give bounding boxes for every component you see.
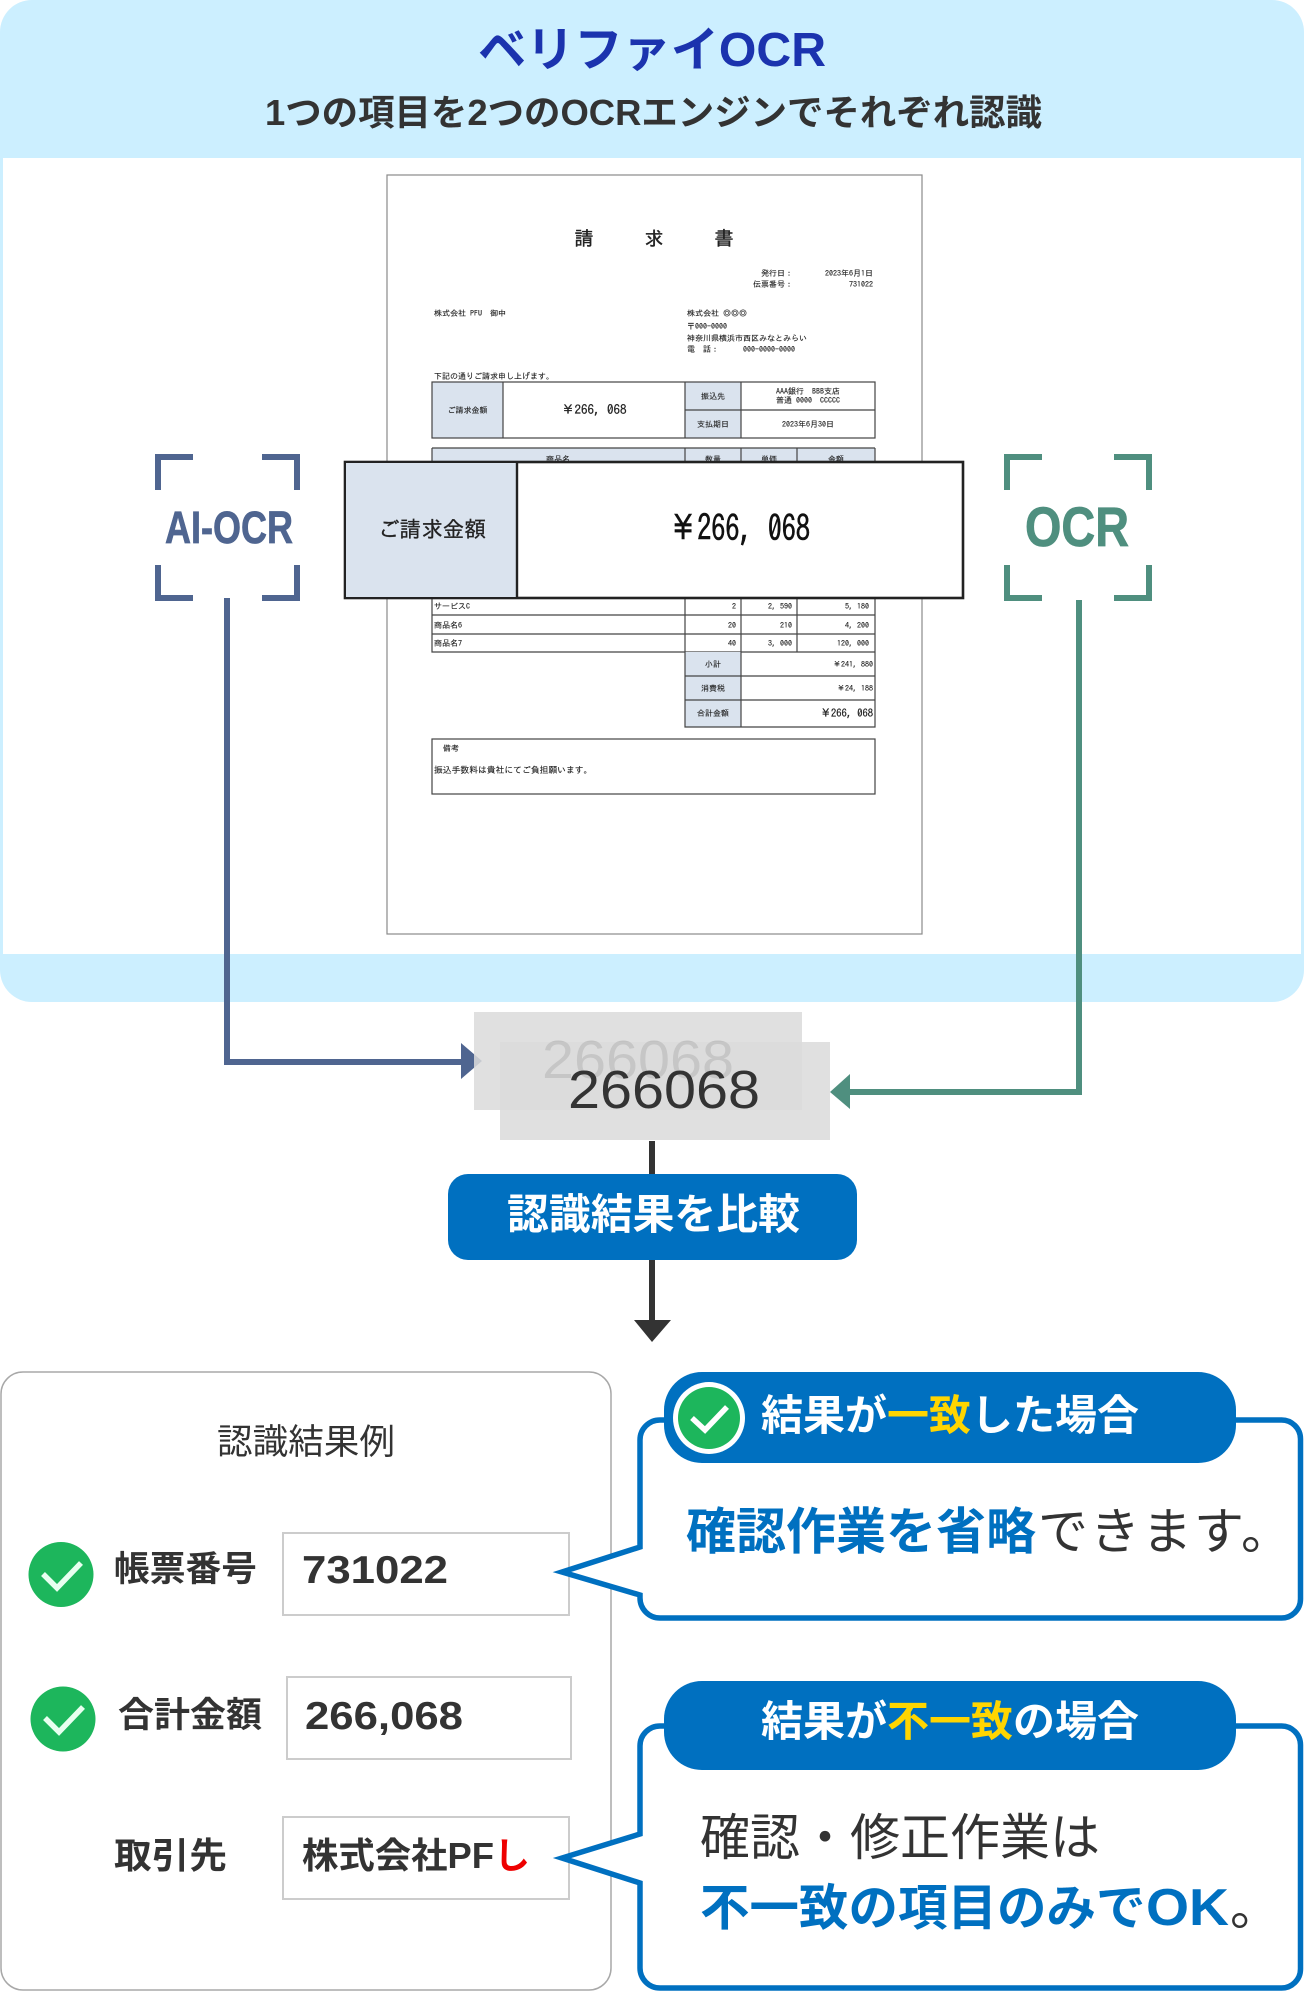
invoice items table: 120, 000 [837,639,869,648]
callout: results mismatch [562,1681,1300,1988]
invoice title: 書 [714,229,734,248]
OCR bracket label: OCR [1025,495,1129,558]
invoice items table: 2 [732,602,736,610]
invoice items table: 金額 [828,455,844,464]
invoice meta: 発行日： [761,269,793,278]
row: client [114,1817,569,1899]
invoice amount table: ¥266, 068 [562,403,627,416]
invoice totals: 小計 [705,660,721,669]
invoice items table: 20 [728,621,736,629]
invoice items table: 数量 [705,455,721,463]
magnified invoice field: ご請求金額 [378,518,486,540]
invoice title: 求 [644,229,664,248]
pill heading [664,1681,1236,1770]
invoice meta: 2023年6月1日 [825,269,873,278]
subtitle: 1つの項目を2つのOCRエンジンでそれぞれ認識 [265,92,1042,133]
invoice totals [685,652,875,727]
invoice items table: 単価 [761,455,777,464]
AI-OCR value [474,1012,802,1110]
row: document number: 帳票番号 [114,1550,257,1589]
callout text: OK [1146,1879,1229,1937]
invoice meta: 株式会社 ◎◎◎ [687,309,747,317]
OCR bracket label [1007,457,1149,598]
callout text: できます。 [1038,1504,1293,1560]
magnified invoice field [345,462,963,598]
AI-OCR bracket label: AI-OCR [165,502,293,553]
invoice items table: 商品名 [546,455,570,464]
invoice document [387,175,922,934]
invoice meta: 電 話： [687,345,719,353]
AI-OCR value: 266068 [542,1030,734,1090]
OCR value: 266068 [568,1060,760,1120]
row: client: 株式会社PF [302,1835,494,1876]
row: document number [28,1533,569,1615]
panel: verify OCR [0,0,1304,1002]
invoice totals: ¥266, 068 [820,709,873,719]
invoice amount table [432,382,875,438]
pill heading [664,1372,1236,1463]
invoice amount table: ご請求金額 [448,406,488,415]
icon: green check [28,1542,94,1607]
invoice items table: 4, 200 [845,621,869,630]
invoice meta [434,269,873,381]
icon: green check [673,1382,745,1454]
magnified invoice field: ¥266, 068 [669,510,810,546]
invoice amount table: 振込先 [701,392,725,401]
invoice totals: 消費税 [701,684,725,693]
row: client: 取引先 [114,1835,227,1876]
row: total amount [30,1677,571,1759]
pill heading: 結果が不一致の場合 [761,1698,1139,1745]
arrow: AI-OCR to result [227,598,482,1079]
invoice items table: サービスC [434,602,470,610]
invoice items table: 商品名6 [434,621,462,630]
row: total amount: 合計金額 [118,1696,262,1735]
invoice title: 請 [574,229,594,248]
invoice items table: 2, 590 [768,602,792,611]
compare button: 認識結果を比較 [507,1191,800,1238]
invoice remarks [432,739,875,794]
callout text [700,1810,1280,1937]
callout text: 確認作業を省略 [686,1504,1036,1560]
invoice meta: 神奈川県横浜市西区みなとみらい [687,334,807,343]
invoice meta: 伝票番号： [753,280,793,288]
callout text: 確認・修正作業は [700,1810,1100,1866]
AI-OCR bracket label [158,457,297,598]
invoice meta: 731022 [849,280,873,288]
title: ベリファイOCR [478,24,826,77]
callout text [686,1504,1293,1560]
invoice items table: 商品名7 [434,639,462,648]
icon: green check [30,1686,96,1752]
recognised values [474,1012,830,1140]
compare button [448,1174,857,1260]
panel: recognition examples [1,1372,611,1990]
invoice meta: 〒000-0000 [687,322,727,330]
invoice items table: 210 [780,621,792,629]
callout text: 不一致の項目のみで [700,1881,1146,1936]
invoice remarks: 備考 [443,743,459,752]
invoice meta: 株式会社 PFU 御中 [434,309,506,317]
row: total amount: 266,068 [305,1695,463,1738]
invoice amount table: 支払期日 [697,420,729,429]
row: client: し [494,1835,530,1876]
invoice amount table: 普通 0000 CCCCC [776,396,840,405]
invoice amount table: AAA銀行 BBB支店 [776,387,840,395]
panel heading: 認識結果例 [217,1423,395,1462]
invoice totals: 合計金額 [697,709,729,718]
invoice items table: 3, 000 [768,639,792,648]
invoice meta: 下記の通りご請求申し上げます。 [434,372,554,381]
row: document number: 731022 [302,1549,448,1592]
invoice remarks: 振込手数料は貴社にてご負担願います。 [434,765,592,775]
invoice items table: 5, 180 [845,602,869,611]
invoice amount table: 2023年6月30日 [782,420,834,429]
invoice meta: 000-0000-0000 [743,345,795,353]
invoice title [574,229,734,248]
callout text: 。 [1230,1880,1280,1936]
invoice items table [432,448,875,652]
invoice totals: ¥24, 188 [837,684,873,693]
OCR value [500,1042,830,1140]
pill heading: 結果が一致した場合 [761,1392,1139,1439]
arrow: OCR to result [830,600,1079,1109]
callout: results match [562,1372,1300,1618]
arrow: results to comparison [634,1141,671,1342]
invoice totals: ¥241, 880 [833,660,873,669]
invoice items table: 40 [728,639,736,647]
